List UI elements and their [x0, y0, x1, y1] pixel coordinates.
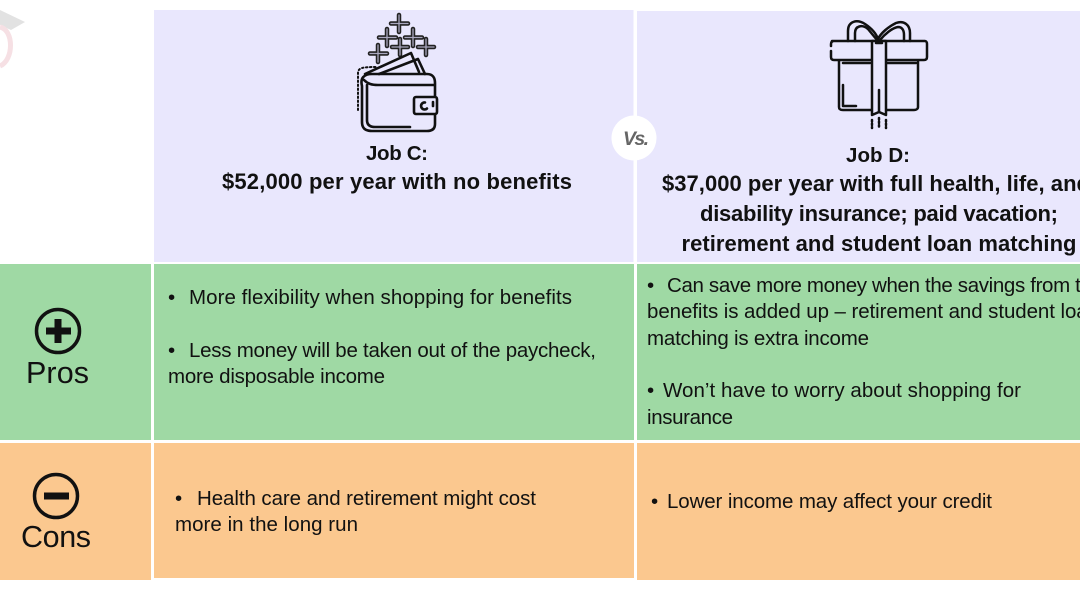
panel: Job D cons: Lower income may affect your credit [667, 490, 992, 513]
heading: Job D: Job D: [846, 144, 910, 167]
panel: Job C pros: • [168, 339, 175, 362]
heading: Job D [662, 144, 1080, 256]
icon: minus in circle [34, 474, 78, 518]
panel: Job D pros: Won’t have to worry about shopping for [663, 379, 1021, 402]
vs badge: Vs. [623, 128, 649, 150]
icon: gift box [831, 21, 927, 128]
icon: plus in circle [36, 310, 80, 352]
panel: Job C cons [154, 443, 634, 578]
panel: Job D header [637, 11, 1080, 262]
panel: Job D cons: • [651, 490, 658, 513]
vs badge [612, 10, 656, 262]
panel: Job C cons: • [175, 487, 182, 510]
label: Cons: Cons [21, 520, 91, 554]
heading: Job D: retirement and student loan matching [682, 231, 1076, 256]
panel: Job C pros: Less money will be taken out of the paycheck, [189, 339, 596, 362]
panel: Cons label [0, 443, 151, 580]
panel: Job C pros: more disposable income [168, 365, 385, 388]
panel: Job C header [154, 10, 634, 262]
logo fragment [0, 10, 25, 66]
panel: Job D pros: insurance [647, 406, 733, 429]
panel: Job D cons [637, 443, 1080, 580]
panel: Job D pros: matching is extra income [647, 327, 869, 350]
heading: Job D: disability insurance; paid vacation; [700, 201, 1058, 226]
panel: Job C pros: More flexibility when shopping for benefits [189, 286, 572, 309]
panel: Job D pros: • [647, 379, 654, 402]
panel: Job C cons: Health care and retirement might cost [197, 487, 536, 510]
icon: wallet with plus signs [358, 15, 437, 131]
panel: Job C pros [154, 264, 634, 440]
panel: Job D pros: • [647, 274, 654, 297]
heading: Job D: $37,000 per year with full health, life, and [662, 171, 1080, 196]
panel: Job D pros [637, 264, 1080, 440]
panel: Pros label [0, 264, 151, 440]
label: Pros: Pros [26, 356, 89, 390]
heading: Job C [222, 142, 572, 194]
panel: Job C pros: • [168, 286, 175, 309]
panel: Job C cons: more in the long run [175, 513, 358, 536]
heading: Job C: Job C: [366, 142, 428, 165]
heading: Job C: $52,000 per year with no benefits [222, 169, 572, 194]
